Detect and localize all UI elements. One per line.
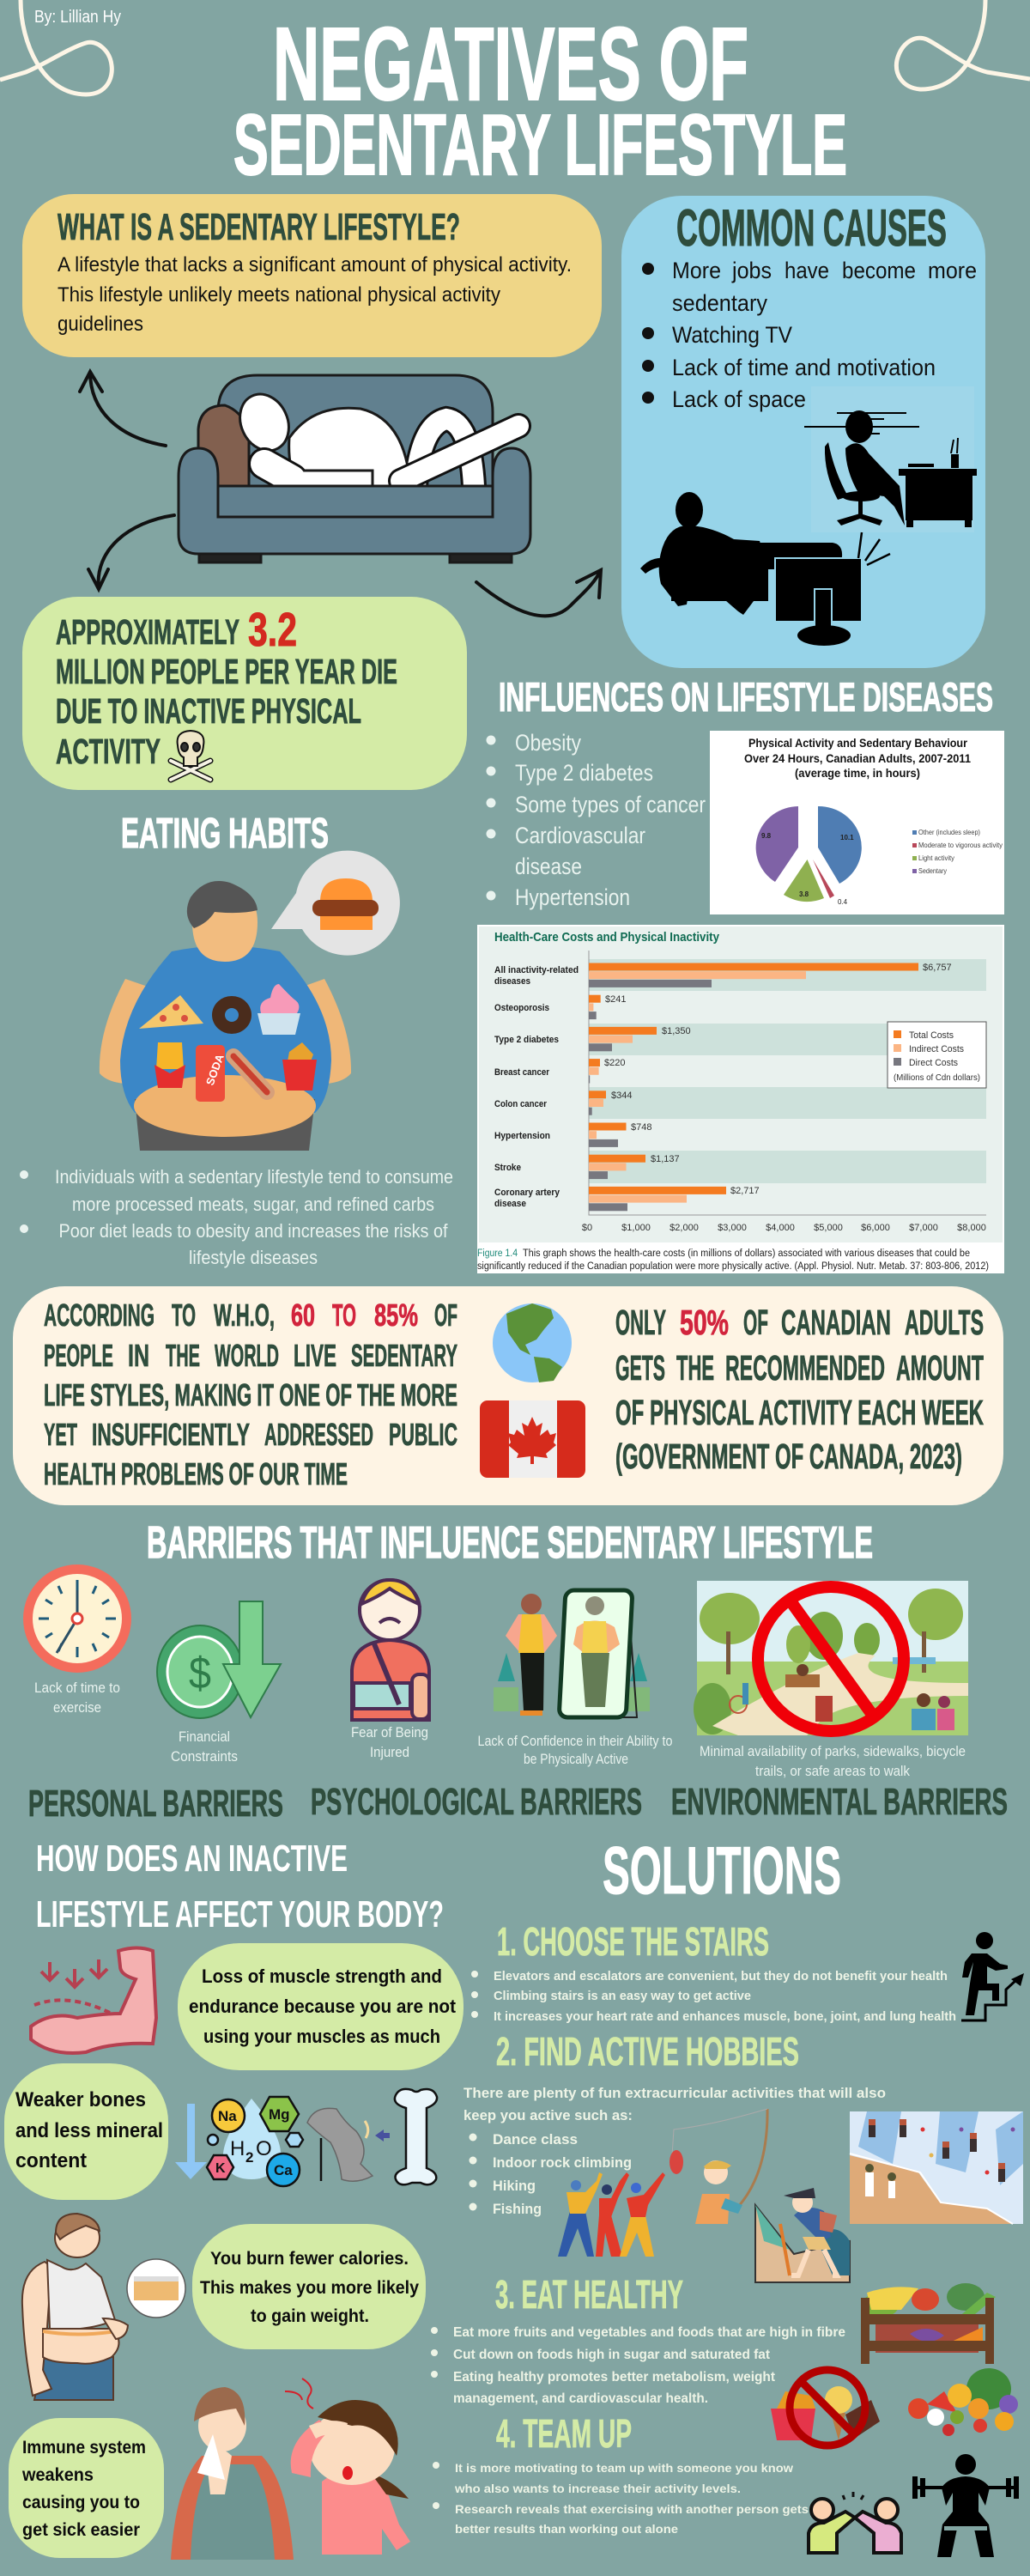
caption: minimal availability — [700, 1743, 966, 1779]
icon: down arrow — [175, 2104, 207, 2179]
title: NEGATIVES OF — [273, 5, 748, 122]
icon: girl with fever — [285, 2379, 410, 2555]
chart: health-care costs bars: Total Costs — [909, 1030, 954, 1041]
barrier category labels: PSYCHOLOGICAL BARRIERS — [311, 1781, 642, 1823]
chart: health-care costs bars: $2,717 — [730, 1186, 760, 1196]
icon: weakened arm muscle — [31, 1947, 156, 2053]
icon: vegetable crate — [861, 2283, 996, 2364]
food: soda can — [196, 1045, 227, 1102]
panel: what is a sedentary lifestyle — [22, 194, 602, 357]
icon: globe — [493, 1303, 572, 1382]
canada statistic text: GETS — [615, 1348, 665, 1388]
chart: health-care costs bars: Osteoporosis — [494, 1003, 549, 1013]
icon: fruit pile — [908, 2368, 1018, 2436]
causes list: Lack of time and motivation — [672, 355, 936, 380]
icon: skull and crossbones — [171, 731, 210, 780]
solution 3: eat healthy: management, and cardiovascular health. — [453, 2391, 708, 2406]
panel: who and canada statistics — [13, 1286, 1003, 1505]
chart: health-care costs bars: $0 — [582, 1223, 592, 1233]
chart: pie of activity over 24 hours: Sedentary — [918, 867, 947, 875]
callout: weaker bones: content — [15, 2149, 87, 2172]
icon: hiker — [755, 2188, 850, 2282]
statistic text: MILLION PEOPLE PER YEAR DIE — [56, 652, 397, 691]
icon: fisher — [670, 2109, 767, 2224]
chart: health-care costs bars: $220 — [604, 1058, 625, 1068]
decorative swirl left — [0, 0, 112, 94]
caption: lack of time — [34, 1680, 120, 1716]
who statistic text: TO — [172, 1297, 196, 1333]
icon: climbing wall — [850, 2111, 1023, 2224]
eating habits text: more processed meats, sugar, and refined carbs — [72, 1194, 434, 1215]
caption: lack of confidence: Lack of Confidence in their Ability to — [477, 1733, 673, 1749]
definition text: guidelines — [58, 313, 143, 336]
canada statistic text: ONLY — [615, 1303, 666, 1342]
icon: minerals: H — [230, 2137, 245, 2160]
callout: weaker bones: Weaker bones — [15, 2088, 146, 2111]
chart: health-care costs bars: $344 — [611, 1091, 632, 1101]
causes list — [642, 258, 977, 412]
icon: no junk food — [771, 2370, 880, 2445]
heading: inactive lifestyle effects: HOW DOES AN INACTIVE — [36, 1838, 348, 1880]
definition text: A lifestyle that lacks a significant amount of physical activity. — [58, 253, 572, 276]
icon: high five — [809, 2492, 901, 2553]
chart: pie of activity over 24 hours: 10.1 — [840, 834, 854, 841]
heading: what is: WHAT IS A SEDENTARY LIFESTYLE? — [58, 206, 460, 248]
food: chicken bucket — [282, 1042, 317, 1091]
caption: lack of confidence — [477, 1733, 673, 1767]
influences list: Type 2 diabetes — [515, 760, 653, 786]
solution 2: find active hobbies: Indoor rock climbing — [493, 2154, 632, 2171]
panel: death statistic — [22, 597, 467, 790]
statistic text — [56, 603, 397, 771]
icon: financial decline: $ — [189, 1649, 211, 1698]
statistic text: ACTIVITY — [56, 732, 161, 771]
icon: minerals: 2 — [245, 2149, 253, 2166]
solution 2: find active hobbies: There are plenty of fun extracurricular activities that will also — [464, 2085, 886, 2101]
icon: person at mirror — [494, 1590, 650, 1717]
icon: injured person — [352, 1580, 429, 1720]
eating habits text: Individuals with a sedentary lifestyle tend to consume — [55, 1166, 453, 1188]
influences list — [486, 730, 706, 910]
chart: health-care costs bars: $3,000 — [718, 1223, 747, 1233]
influences list: Obesity — [515, 730, 581, 756]
who statistic text: WORLD — [215, 1338, 279, 1373]
who statistic text: LIVE — [294, 1338, 336, 1373]
solution 1: choose the stairs: 1. CHOOSE THE STAIRS — [497, 1919, 769, 1964]
who statistic text: W.H.O, — [214, 1297, 275, 1333]
icon: measuring tape bubble — [127, 2259, 185, 2318]
statistic text: 3.2 — [248, 603, 297, 656]
food: soda can: SODA — [203, 1052, 227, 1087]
icon: person watching tv — [640, 492, 890, 646]
chart: health-care costs bars: (Millions of Cdn dollars) — [894, 1073, 980, 1083]
solution 2: find active hobbies: Fishing — [493, 2201, 542, 2217]
solution 2: find active hobbies: Dance class — [493, 2131, 578, 2148]
arrow to causes — [476, 570, 601, 616]
causes list: jobs — [731, 258, 772, 283]
icon: weak bone — [307, 2108, 373, 2181]
callout: fewer calories: You burn fewer calories. — [210, 2249, 409, 2269]
solution 3: eat healthy: Eating healthy promotes better metabolism, weight — [453, 2370, 775, 2385]
chart: health-care costs bars: $1,350 — [662, 1026, 691, 1036]
icon: minerals: O — [256, 2137, 272, 2160]
icon: man measuring waist — [22, 2214, 128, 2400]
who statistic text — [44, 1297, 457, 1492]
chart: health-care costs bars: significantly reduced if the Canadian population were more physically active. (Appl. Physiol. Nutr. Metab. 37: 803-806, 2012) — [477, 1261, 989, 1272]
who statistic text: OF — [434, 1297, 457, 1333]
heading: inactive lifestyle effects: LIFESTYLE AFFECT YOUR BODY? — [36, 1893, 444, 1935]
solution 2: find active hobbies: Hiking — [493, 2178, 536, 2194]
causes list: become — [842, 258, 916, 283]
solution 4: team up: who also wants to increase their activity levels. — [454, 2482, 741, 2495]
solution 2: find active hobbies: 2. FIND ACTIVE HOBBIES — [496, 2029, 799, 2074]
chart: health-care costs bars: Hypertension — [494, 1131, 550, 1141]
icon: minerals: Ca — [274, 2162, 293, 2178]
caption: minimal availability: trails, or safe areas to walk — [755, 1763, 910, 1779]
food: hot dog — [233, 1056, 267, 1092]
icon: minerals — [207, 2097, 303, 2186]
definition text: This lifestyle unlikely meets national physical activity — [58, 283, 500, 307]
who statistic text: INSUFFICIENTLY — [92, 1417, 250, 1452]
food: fries — [154, 1042, 185, 1088]
speech bubble with burger — [271, 851, 400, 956]
canada statistic text: 50% — [680, 1303, 729, 1342]
chart: health-care costs bars: $5,000 — [814, 1223, 843, 1233]
solution 4: team up: Research reveals that exercising with another person gets — [455, 2502, 809, 2516]
chart: pie of activity over 24 hours: 9.8 — [761, 832, 772, 840]
callout: muscle strength: Loss of muscle strength and — [202, 1965, 442, 1987]
panel: common causes — [621, 196, 985, 668]
statistic text: DUE TO INACTIVE PHYSICAL — [56, 691, 361, 731]
chart: pie of activity over 24 hours: Moderate to vigorous activity — [918, 841, 1003, 849]
byline: By: Lillian Hy — [34, 8, 121, 27]
statistic text: APPROXIMATELY — [56, 612, 239, 652]
food: cupcake — [258, 984, 300, 1035]
chart: pie of activity over 24 hours: Physical Activity and Sedentary Behaviour — [748, 736, 967, 750]
canada statistic text: RECOMMENDED — [725, 1348, 885, 1388]
callout: weaker bones — [4, 2063, 168, 2200]
who statistic text: 60 — [291, 1297, 315, 1333]
influences list: Some types of cancer — [515, 792, 706, 817]
decorative swirl right — [896, 0, 1030, 89]
chart: pie of activity over 24 hours: Other (includes sleep) — [918, 829, 980, 836]
solution 1: choose the stairs: Climbing stairs is an easy way to get active — [494, 1989, 751, 2003]
chart: health-care costs bars: $748 — [631, 1122, 651, 1133]
who statistic text: HEALTH PROBLEMS OF OUR TIME — [44, 1456, 348, 1492]
icon: minerals: K — [215, 2161, 226, 2176]
solution 1: choose the stairs: It increases your heart rate and enhances muscle, bone, joint, and lung health — [494, 2009, 956, 2024]
caption: fear of being injured — [351, 1724, 428, 1760]
canada statistic text — [615, 1303, 984, 1476]
callout: fewer calories: This makes you more likely — [200, 2278, 419, 2298]
causes list: sedentary — [672, 290, 767, 316]
solution 1: choose the stairs — [471, 1919, 1024, 2024]
chart: health-care costs bars: $1,137 — [651, 1154, 680, 1164]
icon: minerals: Mg — [269, 2106, 290, 2123]
callout: immune system: causing you to — [22, 2493, 140, 2512]
solution 3: eat healthy: Eat more fruits and vegetables and foods that are high in fibre — [453, 2325, 845, 2340]
influences list: disease — [515, 854, 582, 879]
callout: immune system: weakens — [21, 2465, 94, 2485]
who statistic text: PUBLIC — [389, 1417, 457, 1452]
arrow to statistic — [88, 515, 174, 589]
chart: health-care costs bars: Type 2 diabetes — [494, 1035, 559, 1045]
chart: health-care costs bars: This graph shows the health-care costs (in millions of dollars) associated with various diseases that could be — [523, 1249, 970, 1259]
chart: pie of activity over 24 hours — [710, 731, 1004, 914]
chart: health-care costs bars: $241 — [605, 994, 626, 1005]
caption: lack of confidence: be Physically Active — [524, 1751, 628, 1767]
icon: dancers — [558, 2172, 665, 2257]
causes list: Watching TV — [672, 322, 792, 348]
chart: health-care costs bars: Breast cancer — [494, 1067, 550, 1078]
chart: health-care costs bars: $6,757 — [923, 963, 952, 973]
canada statistic text: OF — [743, 1303, 768, 1342]
solution 4: team up: better results than working out alone — [455, 2522, 678, 2536]
callout: fewer calories — [192, 2224, 426, 2349]
solution 2: find active hobbies — [464, 2029, 1023, 2282]
who statistic text: ADDRESSED — [264, 1417, 373, 1452]
causes list: More — [672, 258, 721, 283]
callout: muscle strength — [178, 1943, 464, 2070]
chart: health-care costs bars: disease — [494, 1199, 526, 1209]
icon: minerals: Na — [218, 2108, 237, 2124]
who statistic text: THE — [166, 1338, 200, 1373]
causes list: have — [785, 258, 829, 283]
canada statistic text: CANADIAN — [781, 1303, 891, 1342]
icon: healthy bone — [395, 2089, 437, 2184]
caption: financial constraints — [171, 1728, 238, 1765]
chart: health-care costs bars: $2,000 — [670, 1223, 699, 1233]
caption: financial constraints: Financial — [179, 1728, 230, 1745]
caption: minimal availability: Minimal availability of parks, sidewalks, bicycle — [700, 1743, 966, 1759]
chart: health-care costs bars: $6,000 — [861, 1223, 890, 1233]
icon: canadian flag — [480, 1400, 585, 1478]
chart: pie of activity over 24 hours: 0.4 — [838, 898, 848, 906]
solution 1: choose the stairs: Elevators and escalators are convenient, but they do not benefit your health — [494, 1969, 948, 1984]
icon: person at desk — [804, 386, 977, 532]
chart: pie of activity over 24 hours: (average time, in hours) — [795, 766, 920, 780]
eating habits text — [20, 1166, 453, 1268]
chart: health-care costs bars: All inactivity-related — [494, 965, 579, 975]
icon: small arrow — [375, 2129, 390, 2142]
heading: solutions: SOLUTIONS — [603, 1832, 841, 1908]
who statistic text: IN — [128, 1338, 149, 1373]
chart: health-care costs bars: diseases — [494, 976, 530, 987]
callout: immune system: Immune system — [22, 2438, 146, 2458]
solution 3: eat healthy — [431, 2272, 1018, 2445]
who statistic text: SEDENTARY — [351, 1338, 457, 1373]
callout: fewer calories: to gain weight. — [251, 2306, 369, 2326]
who statistic text: YET — [44, 1417, 77, 1452]
food: donut — [212, 996, 251, 1034]
heading: eating habits: EATING HABITS — [121, 811, 329, 857]
chart: health-care costs bars: Figure 1.4 — [477, 1249, 518, 1259]
caption: lack of time: Lack of time to — [34, 1680, 120, 1696]
causes list: Lack of space — [672, 386, 806, 412]
sedentary couch illustration — [179, 375, 530, 562]
caption: fear of being injured: Injured — [370, 1744, 409, 1760]
influences list: Hypertension — [515, 884, 630, 910]
chart: health-care costs bars: Colon cancer — [494, 1099, 548, 1109]
callout: immune system — [9, 2418, 164, 2558]
chart: health-care costs bars: Direct Costs — [909, 1058, 958, 1068]
who statistic text: PEOPLE — [44, 1338, 113, 1373]
callout: weaker bones: and less mineral — [15, 2119, 163, 2142]
who statistic text: 85% — [374, 1297, 418, 1333]
causes list: more — [928, 258, 977, 283]
who statistic text: TO — [332, 1297, 356, 1333]
canada statistic text: THE — [676, 1348, 714, 1388]
chart: health-care costs bars: Coronary artery — [494, 1188, 560, 1198]
who statistic text: ACCORDING — [44, 1297, 154, 1333]
chart: health-care costs bars: $1,000 — [621, 1223, 651, 1233]
chart: health-care costs bars: Stroke — [494, 1163, 521, 1173]
icon: crossed out park — [694, 1581, 968, 1735]
caption: lack of time: exercise — [53, 1699, 101, 1716]
chart: health-care costs bars: $4,000 — [766, 1223, 795, 1233]
heading: inactive lifestyle effects — [36, 1838, 444, 1935]
title — [233, 5, 847, 193]
who statistic text: LIFE STYLES, MAKING IT ONE OF THE MORE — [44, 1377, 457, 1413]
caption: financial constraints: Constraints — [171, 1748, 238, 1765]
eating habits text: lifestyle diseases — [189, 1247, 318, 1268]
chart: health-care costs bars: $8,000 — [957, 1223, 986, 1233]
barrier category labels: PERSONAL BARRIERS — [28, 1783, 283, 1825]
icon: financial decline — [157, 1601, 281, 1718]
food: pizza — [139, 995, 203, 1029]
chart: pie of activity over 24 hours: 3.8 — [799, 890, 809, 898]
icon: clock — [23, 1564, 131, 1673]
chart: health-care costs bars: Health-Care Costs and Physical Inactivity — [494, 930, 720, 945]
solution 3: eat healthy: Cut down on foods high in sugar and saturated fat — [453, 2348, 770, 2362]
chart: pie of activity over 24 hours: Light activity — [918, 854, 954, 862]
solution 4: team up: It is more motivating to team up with someone you know — [455, 2461, 793, 2475]
eating habits text: Poor diet leads to obesity and increases the risks of — [58, 1220, 448, 1242]
influences list: Cardiovascular — [515, 823, 645, 848]
arrow to definition — [80, 372, 166, 446]
callout: muscle strength: endurance because you are not — [189, 1996, 457, 2017]
chart: health-care costs bars — [477, 925, 1004, 1273]
icon: person climbing stairs — [961, 1932, 1024, 2020]
chart: health-care costs bars: Indirect Costs — [909, 1044, 964, 1054]
definition text — [58, 253, 572, 336]
callout: immune system: get sick easier — [22, 2520, 140, 2540]
solution 2: find active hobbies: keep you active such as: — [464, 2107, 633, 2123]
chart: health-care costs bars: $7,000 — [909, 1223, 938, 1233]
solution 3: eat healthy: 3. EAT HEALTHY — [495, 2272, 683, 2317]
icon: weight lifter — [912, 2454, 1019, 2557]
icon: man with cold — [171, 2387, 294, 2560]
barrier category labels — [28, 1781, 1008, 1825]
solution 4: team up — [433, 2411, 1019, 2557]
solution 4: team up: 4. TEAM UP — [496, 2411, 632, 2456]
illustration: overweight person with food — [100, 851, 400, 1151]
callout: muscle strength: using your muscles as much — [203, 2026, 440, 2047]
caption: fear of being injured: Fear of Being — [351, 1724, 428, 1741]
chart: pie of activity over 24 hours: Over 24 Hours, Canadian Adults, 2007-2011 — [744, 751, 971, 765]
